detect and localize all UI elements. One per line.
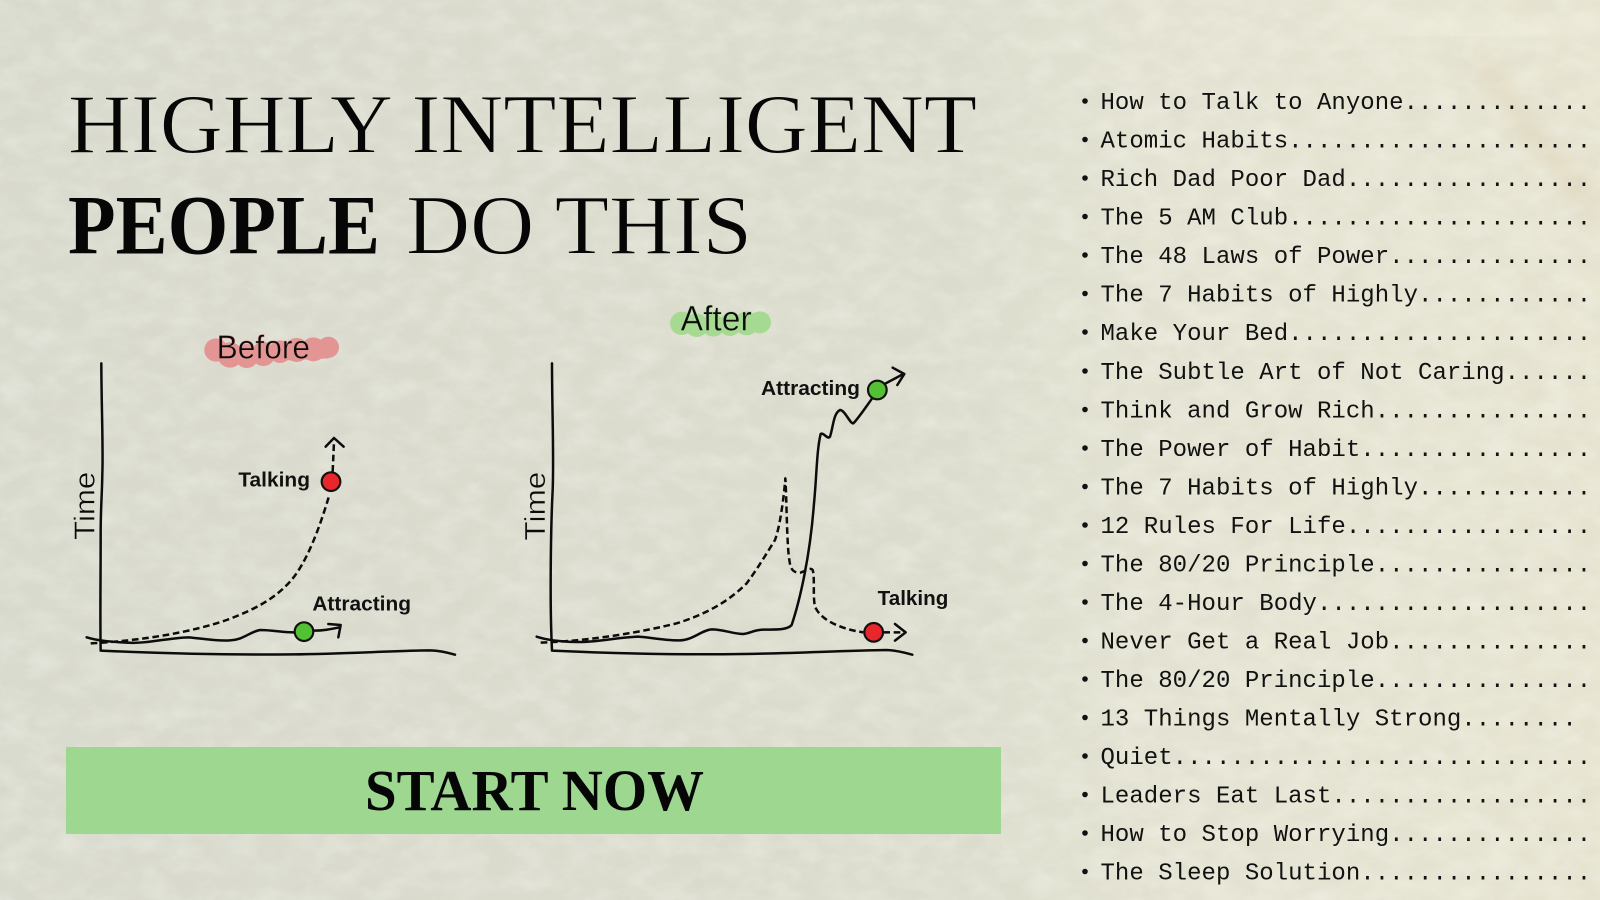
item 15: Never Get a Real Job..............	[1100, 630, 1591, 656]
line: talking (dashed)	[91, 438, 344, 643]
label: talking: Talking	[238, 470, 310, 492]
chart: before	[69, 330, 455, 655]
axes	[551, 363, 912, 655]
chart: after	[520, 300, 948, 655]
item 8: The Subtle Art of Not Caring......	[1100, 360, 1591, 387]
marker: talking	[864, 623, 883, 642]
item 12: 12 Rules For Life.................	[1100, 514, 1591, 541]
item 4: The 5 AM Club.....................	[1100, 206, 1591, 232]
label: attracting: Attracting	[312, 594, 411, 616]
marker: attracting	[295, 622, 313, 641]
line: talking (dashed)	[541, 478, 906, 643]
axis label: time: Time	[69, 472, 101, 540]
title: DO THIS	[406, 178, 752, 272]
title	[68, 78, 977, 272]
item 16: The 80/20 Principle...............	[1100, 668, 1591, 695]
item 19: Leaders Eat Last..................	[1100, 784, 1591, 810]
label: talking: Talking	[878, 588, 948, 610]
item 6: The 7 Habits of Highly............	[1100, 282, 1591, 310]
button: start now: START NOW	[365, 758, 704, 823]
line: attracting (solid)	[87, 624, 341, 643]
title: PEOPLE	[68, 178, 380, 272]
axis label: time: Time	[520, 472, 552, 541]
title: HIGHLY INTELLIGENT	[68, 78, 977, 172]
item 2: Atomic Habits.....................	[1100, 128, 1591, 156]
item 17: 13 Things Mentally Strong........	[1100, 706, 1577, 734]
line: attracting (solid)	[537, 368, 904, 642]
item 13: The 80/20 Principle...............	[1100, 552, 1591, 580]
item 9: Think and Grow Rich...............	[1100, 398, 1591, 426]
item 7: Make Your Bed.....................	[1100, 321, 1591, 348]
axes	[100, 363, 455, 655]
marker: attracting	[868, 381, 887, 399]
label: attracting: Attracting	[761, 378, 860, 400]
item 5: The 48 Laws of Power..............	[1100, 244, 1591, 271]
item 1: How to Talk to Anyone.............	[1100, 90, 1591, 117]
marker: talking	[322, 472, 340, 491]
label: after with green highlight: After	[681, 300, 752, 339]
item 14: The 4-Hour Body...................	[1100, 591, 1591, 618]
label: before with red highlight: Before	[217, 330, 310, 367]
item 3: Rich Dad Poor Dad.................	[1100, 167, 1591, 194]
item 10: The Power of Habit................	[1100, 437, 1591, 464]
item 20: How to Stop Worrying..............	[1100, 822, 1591, 849]
item 18: Quiet.............................	[1100, 745, 1591, 772]
item 11: The 7 Habits of Highly............	[1100, 476, 1591, 502]
book list	[1082, 90, 1591, 888]
button: start now	[66, 747, 1001, 834]
item 21: The Sleep Solution................	[1100, 860, 1591, 888]
